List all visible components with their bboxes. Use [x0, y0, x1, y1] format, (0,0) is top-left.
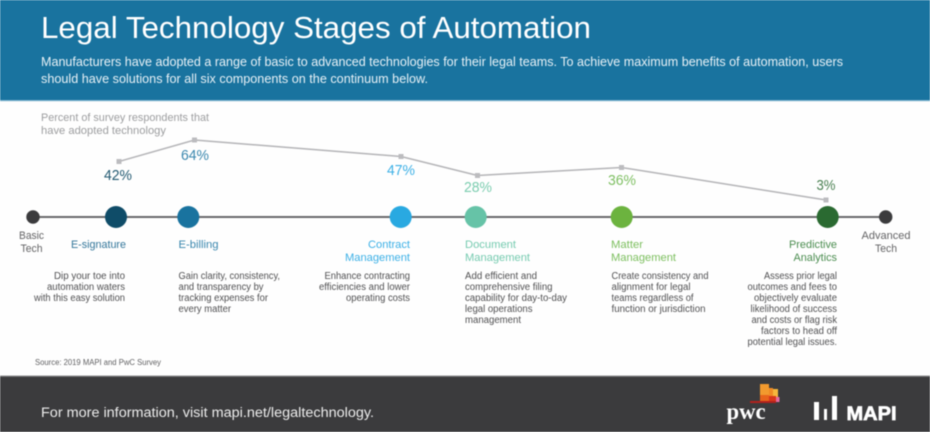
logo: MAPI: MAPI	[846, 403, 896, 425]
stage: matter management: alignment for legal	[612, 282, 690, 293]
stage: document management: comprehensive filing	[465, 282, 552, 293]
logo: pwc	[726, 384, 780, 424]
stage: predictive analytics: Analytics	[794, 252, 837, 264]
stage: predictive analytics: likelihood of success	[750, 304, 837, 315]
stage: e-signature: Dip your toe into	[54, 271, 126, 282]
stage: e-billing: and transparency by	[178, 282, 264, 293]
stage: document management: legal operations	[465, 304, 533, 315]
continuum timeline	[26, 206, 892, 228]
stage: matter management: function or jurisdiction	[612, 304, 706, 315]
stage: matter management: Management	[611, 252, 676, 264]
footer call to action: For more information, visit mapi.net/legaltechnology.	[41, 405, 374, 421]
stage: document management: capability for day-to-day	[465, 293, 567, 304]
stage: predictive analytics: and costs or flag risk	[752, 315, 837, 326]
source note: Source: 2019 MAPI and PwC Survey	[35, 358, 161, 367]
intro text: should have solutions for all six components on the continuum below.	[41, 72, 428, 86]
stage: e-signature	[33, 239, 126, 304]
stage: predictive analytics: outcomes and fees to	[748, 282, 838, 293]
stage: matter management: teams regardless of	[612, 293, 694, 304]
header banner	[0, 0, 930, 101]
title: Legal Technology Stages of Automation	[41, 11, 591, 45]
label: advanced tech: Advanced	[862, 230, 910, 242]
stage: document management: Document	[465, 239, 516, 251]
label: basic tech	[19, 230, 45, 255]
endpoint: basic tech	[26, 210, 40, 224]
stage: e-billing	[178, 239, 280, 315]
logo: MAPI	[814, 396, 896, 425]
endpoint: advanced tech	[879, 210, 892, 224]
chart label: have adopted technology	[41, 125, 167, 137]
percentages	[104, 148, 836, 196]
stage: contract management: Contract	[368, 239, 410, 251]
stage dot: matter management	[611, 206, 633, 228]
logo: pwc: pwc	[726, 399, 766, 424]
stage: predictive analytics: potential legal issues.	[748, 337, 837, 348]
stage dot: predictive analytics	[817, 206, 839, 228]
stage: e-signature: E-signature	[71, 239, 126, 251]
percentages: 36%	[608, 173, 636, 189]
stage: contract management: Enhance contracting	[324, 271, 410, 282]
adoption line chart	[116, 138, 828, 202]
stage: document management: Add efficient and	[465, 271, 537, 282]
stage: e-billing: E-billing	[178, 239, 218, 251]
stage: e-billing: every matter	[178, 304, 232, 315]
percentages: 28%	[464, 180, 492, 196]
stage: predictive analytics: Assess prior legal	[764, 271, 837, 282]
intro text: Manufacturers have adopted a range of basic to advanced technologies for their legal teams. To achieve maximum benefits of automation, users	[41, 55, 843, 69]
stage: e-billing: tracking expenses for	[178, 293, 269, 304]
stage: contract management: operating costs	[346, 293, 410, 304]
stage: matter management: Matter	[611, 239, 643, 251]
stage: e-signature: with this easy solution	[33, 293, 125, 304]
stage: matter management	[611, 239, 708, 315]
label: advanced tech	[862, 230, 910, 255]
stage dot: contract management	[390, 206, 412, 228]
stage: e-signature: automation waters	[47, 282, 125, 293]
percentages: 47%	[387, 163, 415, 179]
chart label	[41, 112, 209, 137]
intro text	[41, 55, 843, 86]
percentages: 3%	[816, 178, 836, 194]
stage dot: e-signature	[105, 206, 127, 228]
chart label: Percent of survey respondents that	[41, 112, 209, 124]
stage: predictive analytics	[748, 239, 838, 348]
stage dot: e-billing	[177, 206, 199, 228]
stage: document management: Management	[465, 252, 530, 264]
stage: contract management: efficiencies and lower	[319, 282, 411, 293]
footer bar	[0, 376, 930, 432]
stage: predictive analytics: factors to head off	[761, 326, 837, 337]
label: basic tech: Basic	[19, 230, 45, 242]
stage dot: document management	[465, 206, 487, 228]
percentages: 64%	[181, 148, 209, 164]
stage: e-billing: Gain clarity, consistency,	[178, 271, 280, 282]
stage: predictive analytics: objectively evaluate	[754, 293, 838, 304]
stage: contract management	[319, 239, 411, 304]
stage: matter management: Create consistency and	[612, 271, 708, 282]
stage: document management: management	[465, 315, 521, 326]
stage: contract management: Management	[345, 252, 410, 264]
percentages: 42%	[104, 168, 132, 184]
stage: document management	[465, 239, 567, 326]
label: basic tech: Tech	[20, 243, 42, 255]
stage: predictive analytics: Predictive	[789, 239, 837, 251]
label: advanced tech: Tech	[875, 243, 897, 255]
